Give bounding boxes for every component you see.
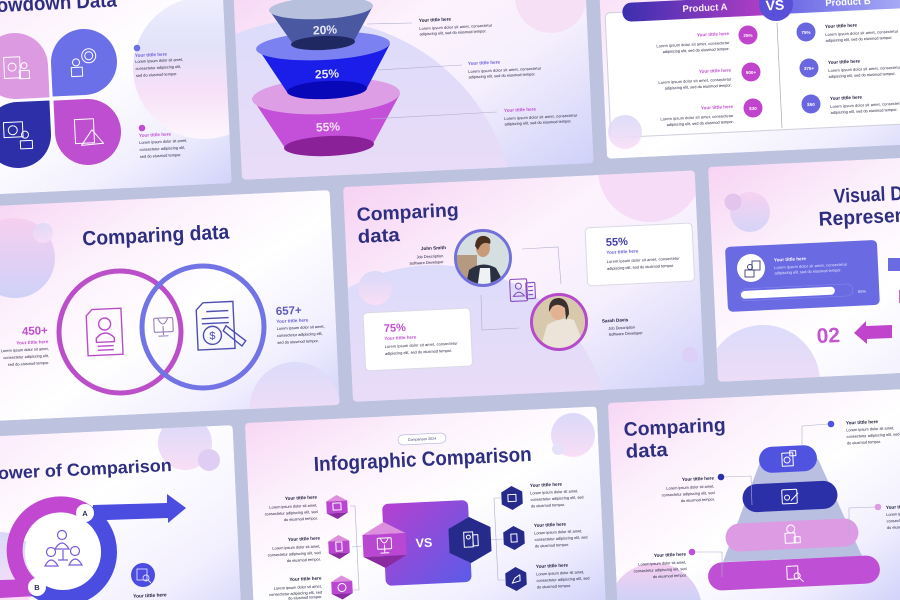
row 500+ [658, 62, 760, 91]
right hexagon group [501, 486, 527, 591]
left text three [268, 575, 323, 600]
value 657+: Your tittle here [276, 317, 309, 324]
card 55%: Lorem ipsum dolor sit amet, consectetur [607, 256, 680, 264]
decorative circle left [0, 218, 55, 298]
petal navy [0, 100, 53, 170]
row 75%: adipiscing elit, sed do eiusmod tempor. [825, 35, 893, 43]
row 500+: Your tittle here [699, 67, 731, 74]
arrow pointing left [854, 321, 892, 344]
right text two: do eiusmod tempor. [535, 542, 569, 548]
value 450+ [0, 325, 50, 367]
hexagon three [505, 567, 527, 591]
card 55%: adipiscing elit, sed do eiusmod tempor. [607, 263, 674, 271]
callout one: Lorem ipsum dolor sit amet, [135, 57, 183, 64]
john label: John Smith [421, 245, 446, 251]
icon: monitor trophy [154, 318, 174, 336]
row $30: adipiscing elit, sed do eiusmod tempor. [667, 119, 734, 127]
funnel chart [251, 0, 401, 158]
blue ring [142, 266, 264, 388]
petal chart [0, 27, 123, 170]
funnel 25% [255, 29, 391, 101]
row 375+: adipiscing elit, sed do eiusmod tempor. [828, 71, 896, 79]
blue arc [31, 505, 117, 600]
decorative circle [730, 192, 770, 232]
icon: profile documents [510, 278, 536, 302]
header product A: Product A [682, 2, 728, 15]
left text two: consectetur adipiscing elit, sed [268, 550, 321, 557]
pyramid backing [723, 459, 862, 562]
row 375+: Lorem ipsum dolor sit amet, consectetur [828, 65, 900, 73]
row 25%: Your tittle here [697, 31, 729, 38]
callout bottom [633, 549, 695, 580]
white centre [25, 514, 101, 590]
hexagon two [328, 535, 350, 559]
callout top: Your tittle here [846, 419, 879, 425]
decorative circle top right [598, 118, 702, 222]
callout one: sed do eiusmod tempor. [136, 71, 177, 78]
card 75%: Your tittle here [384, 334, 417, 341]
decorative small circle [724, 194, 742, 210]
left text two: Lorem ipsum dolor sit amet, [272, 543, 320, 551]
callout left [661, 474, 724, 504]
hexagon one [501, 486, 523, 510]
panel: slide visual data [706, 150, 900, 439]
icon: person document [86, 308, 123, 356]
right text three: Lorem ipsum dolor sit amet, [536, 569, 584, 576]
funnel text two: adipiscing elit, sed do eiusmod tempor. [468, 71, 536, 79]
row 500+: adipiscing elit, sed do eiusmod tempor. [665, 82, 732, 91]
card 75%: 75% [384, 322, 406, 335]
row 375+: 375+ [804, 66, 814, 71]
value 450+: 450+ [22, 325, 48, 338]
row 500+: 500+ [746, 70, 756, 75]
petal pink [0, 31, 50, 101]
progress bar: 85% [858, 289, 866, 294]
right text two: consectetur adipiscing elit, sed [534, 534, 588, 542]
callout top: consectetur adipiscing elit, sed [846, 431, 900, 439]
right text one [530, 481, 584, 508]
large navy hexagon [448, 516, 492, 564]
large purple hexagon [362, 521, 407, 569]
card text [774, 254, 848, 275]
decorative corner circle [515, 0, 587, 33]
heading: data [357, 225, 401, 248]
pyramid chart [707, 445, 881, 591]
decorative circle [133, 0, 230, 139]
value 450+: consectetur adipiscing elit, [3, 353, 49, 360]
row 25%: Lorem ipsum dolor sit amet, consectetur [656, 40, 730, 48]
heading [817, 180, 900, 231]
funnel 25%: 25% [315, 66, 340, 82]
tier 1 [758, 445, 818, 473]
callout one: Your tittle here [135, 51, 168, 58]
header product A [622, 0, 764, 22]
connector bottom [695, 552, 722, 577]
connector right [849, 507, 875, 535]
connector top [802, 424, 828, 445]
left text one: consectetur adipiscing elit, sed [265, 509, 318, 516]
sarah label: Sarah Davis [602, 317, 629, 323]
row 75% [796, 22, 898, 42]
right text one: consectetur adipiscing elit, sed [530, 494, 584, 502]
year pill [398, 433, 446, 445]
callout left: Your tittle here [682, 475, 714, 482]
VS text: VS [415, 536, 433, 550]
decorative left circle [0, 532, 40, 600]
decorative small circle [358, 271, 392, 305]
callout two: Lorem ipsum dolor sit amet, [139, 138, 187, 145]
value 450+: Your tittle here [16, 339, 49, 345]
card text: Your tittle here [774, 256, 807, 262]
card 75%: adipiscing elit, sed do eiusmod tempor. [385, 348, 452, 356]
card 55%: 55% [606, 236, 628, 249]
right text three: consectetur adipiscing elit, sed [536, 575, 590, 583]
callout one [134, 45, 184, 78]
left text one: Lorem ipsum dolor sit amet, [269, 502, 317, 510]
value 657+: consectetur adipiscing elit, [277, 331, 323, 338]
callout two [139, 125, 188, 159]
card text: Lorem ipsum dolor sit amet, consectetur [774, 262, 848, 270]
heading [623, 414, 727, 463]
VS badge [759, 0, 793, 21]
card 55%: Your tittle here [606, 248, 639, 255]
row $50: Your tittle here [830, 94, 863, 101]
panel: slide pyramid comparing data [608, 389, 900, 600]
funnel text three: Your tittle here [504, 106, 537, 113]
callout two: Your tittle here [139, 131, 172, 138]
funnel 55% [251, 75, 401, 158]
connector bottom [481, 295, 519, 330]
badge B: B [34, 583, 40, 592]
vs panel [382, 500, 472, 586]
heading: data [625, 439, 668, 463]
row 75%: Your tittle here [825, 22, 858, 29]
number 02: 02 [816, 324, 841, 348]
person john photo [455, 230, 511, 290]
right text three: do eiusmod tempor. [537, 583, 571, 589]
decorative circle [158, 416, 212, 470]
right text two: Lorem ipsum dolor sit amet, [534, 528, 582, 535]
year pill: Comparison 2024 [408, 437, 436, 442]
hexagon three [331, 575, 353, 600]
tier 2 [742, 480, 838, 513]
sarah label: Job Description [608, 324, 635, 331]
icon: team [45, 530, 82, 566]
panel: slide power of comparison [0, 416, 241, 600]
ring diagram [0, 494, 186, 600]
card text: adipiscing elit, sed do eiusmod tempor. [774, 267, 842, 275]
panel: slide people comparing data [260, 118, 705, 600]
right text two: Your tittle here [534, 521, 567, 528]
hexagon two [503, 526, 525, 550]
funnel text two [468, 60, 542, 79]
icon badge search [131, 563, 155, 587]
row 75%: 75% [801, 30, 811, 35]
funnel text three [504, 108, 578, 126]
decorative small circle [552, 443, 564, 455]
value 657+ [276, 304, 325, 345]
decorative circle bottom right [250, 362, 340, 409]
callout left: do eiusmod tempor. [681, 496, 715, 503]
petal blue [49, 27, 119, 97]
row $50 [802, 94, 900, 114]
decorative large circle [260, 265, 610, 600]
badge A [76, 504, 94, 522]
callout left: Lorem ipsum dolor sit amet, [666, 483, 714, 491]
decorative small circle [33, 223, 53, 243]
row 25%: adipiscing elit, sed do eiusmod tempor. [663, 46, 730, 54]
right text three [536, 562, 590, 589]
row $50: adipiscing elit, sed do eiusmod tempor. [830, 107, 898, 115]
caption: Your tittle here [133, 592, 167, 600]
funnel text one: Lorem ipsum dolor sit amet, consectetur [419, 23, 493, 31]
person sarah photo [531, 294, 587, 350]
left text three: Your tittle here [289, 575, 322, 582]
callout top: Lorem ipsum dolor sit amet, [846, 425, 894, 432]
callout bottom: Lorem ipsum dolor sit amet, [638, 559, 686, 567]
left text one: do eiusmod tempor. [284, 515, 318, 522]
funnel 20% [269, 0, 373, 51]
funnel text three: Lorem ipsum dolor sit amet, consectetur [504, 113, 578, 121]
heading: Comparing [356, 200, 459, 226]
row $30: Lorem ipsum dolor sit amet, consectetur [660, 113, 734, 121]
icon badge [737, 254, 765, 282]
divider [777, 23, 782, 128]
callout top: do eiusmod tempor. [847, 439, 881, 445]
heading [356, 200, 460, 248]
value 450+: sed do eiusmod tempor. [8, 360, 49, 367]
heading: Infographic Comparison [313, 443, 532, 476]
heading: Comparing data [82, 221, 230, 250]
row $50: $50 [807, 102, 815, 107]
inner white table [605, 0, 900, 138]
decorative large circle [235, 22, 508, 180]
purple input bar [0, 579, 37, 598]
funnel text two: Your tittle here [468, 59, 501, 66]
row 375+ [800, 58, 900, 78]
funnel text one: Your tittle here [419, 16, 452, 23]
value 657+: Lorem ipsum dolor sit amet, [277, 324, 325, 331]
decorative small circle [198, 449, 220, 471]
decorative bottom left circle [609, 563, 701, 600]
funnel text one: adipiscing elit, sed do eiusmod tempor. [419, 28, 487, 36]
right text one: Lorem ipsum dolor sit amet, [530, 488, 578, 495]
decorative circle [608, 115, 642, 149]
value 657+: 657+ [276, 305, 302, 318]
callout two: sed do eiusmod tempor. [140, 152, 182, 159]
right text one: Your tittle here [530, 481, 563, 488]
tier 4 [707, 555, 881, 591]
arrow stub blue [888, 258, 900, 271]
john label: Software Developer [409, 259, 444, 266]
funnel 55%: 55% [316, 119, 341, 135]
connectors right [490, 498, 505, 580]
purple arc [15, 504, 86, 589]
left hexagon group [326, 495, 353, 600]
row $30 [660, 98, 762, 127]
left text three: consectetur adipiscing elit, sed [269, 589, 322, 597]
arrow stub pink [899, 290, 900, 303]
panel: slide infographic comparison [245, 407, 606, 600]
funnel text one [419, 18, 492, 36]
connector left [724, 476, 752, 505]
row 75%: Lorem ipsum dolor sit amet, consectetur [825, 29, 899, 37]
connectors left [350, 506, 362, 590]
left text two: Your tittle here [288, 535, 320, 542]
left text three: Lorem ipsum dolor sit amet, [274, 583, 322, 591]
badge B [28, 578, 46, 596]
panel: slide showdown data petals [0, 0, 232, 194]
petal purple [53, 97, 123, 167]
john label [409, 245, 447, 266]
product B rows [796, 21, 900, 115]
panel: slide venn comparing data [0, 190, 340, 421]
funnel 20%: 20% [313, 22, 338, 38]
connector top [522, 247, 561, 284]
callout bottom: consectetur adipiscing elit, sed [634, 566, 687, 573]
header product B [780, 0, 900, 14]
callout bottom: do eiusmod tempor. [653, 572, 687, 579]
card 75% [363, 308, 473, 371]
icon: invoice and pencil [196, 301, 246, 350]
left text one: Your tittle here [285, 494, 317, 501]
row 25% [656, 26, 758, 54]
callout two: consectetur adipiscing elit, [139, 145, 185, 152]
callout right [875, 503, 900, 530]
value 450+: Lorem ipsum dolor sit amet, [1, 346, 49, 353]
icon: invoice and pencil: $ [209, 330, 216, 343]
row 375+: Your tittle here [828, 58, 861, 65]
purple ring [59, 271, 181, 393]
right text one: do eiusmod tempor. [531, 502, 565, 508]
callout bottom: Your tittle here [654, 551, 686, 558]
tier 3 [725, 518, 859, 552]
sarah label: Software Developer [608, 330, 644, 337]
progress bar [740, 284, 866, 301]
right text three: Your tittle here [536, 562, 569, 569]
panel: slide product comparison [597, 0, 900, 159]
callout left: consectetur adipiscing elit, sed [662, 490, 715, 497]
john label: Job Description [416, 253, 443, 259]
panel: slide funnel [234, 0, 594, 180]
row 500+: Lorem ipsum dolor sit amet, consectetur [658, 76, 732, 85]
funnel text two: Lorem ipsum dolor sit amet, consectetur [468, 66, 542, 74]
decorative circle [551, 413, 595, 457]
product A rows [656, 26, 762, 127]
row $30: $30 [749, 106, 757, 111]
card 75%: Lorem ipsum dolor sit amet, consectetur [385, 341, 458, 349]
hexagon one [326, 495, 348, 519]
venn diagram [59, 266, 264, 393]
funnel text three: adipiscing elit, sed do eiusmod tempor. [504, 118, 572, 126]
progress card [725, 240, 880, 312]
leader lines [367, 23, 497, 119]
heading: Comparing [623, 414, 726, 441]
value 657+: sed do eiusmod tempor. [277, 338, 319, 345]
row $30: Your tittle here [701, 104, 733, 111]
left text two [267, 535, 321, 564]
right text two [534, 521, 588, 548]
callout top [828, 418, 900, 445]
sarah label [602, 317, 644, 337]
decorative bottom circle [706, 325, 820, 439]
badge A: A [82, 509, 88, 518]
left text one [264, 494, 318, 523]
callout one: consectetur adipiscing elit, [135, 64, 181, 71]
left text two: do eiusmod tempor. [287, 556, 321, 563]
row 25%: 25% [743, 33, 753, 38]
blue output arrow [93, 494, 186, 525]
card 55% [585, 223, 695, 286]
decorative small circle right [682, 347, 698, 363]
